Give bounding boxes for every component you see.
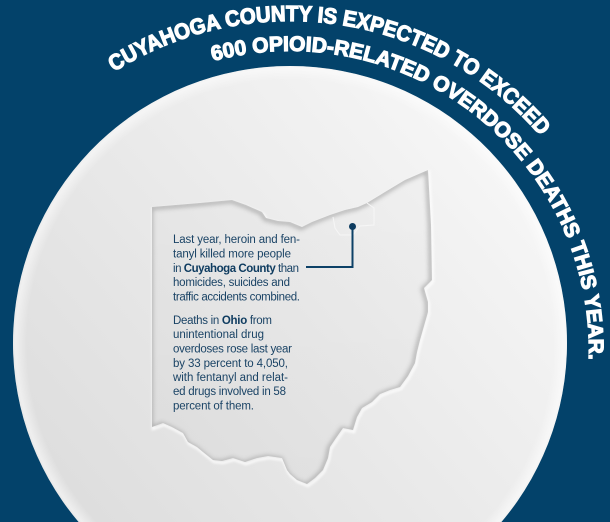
Ohio embossed shape — [151, 170, 433, 486]
text block: Ohio — [172, 315, 292, 412]
Cuyahoga County outline — [333, 203, 374, 235]
text block: Ohio: Deaths in Ohio from — [173, 315, 272, 327]
headline: CUYAHOGA COUNTY IS EXPECTED TO EXCEED — [108, 5, 550, 134]
text block: Cuyahoga County: in Cuyahoga County than — [173, 263, 299, 275]
text block: Ohio: with fentanyl and relat- — [172, 372, 288, 384]
text block: Cuyahoga County: traffic accidents combined. — [173, 292, 300, 304]
text block: Cuyahoga County: tanyl killed more people — [173, 248, 291, 260]
text block: Ohio: by 33 percent to 4,050, — [173, 358, 288, 370]
text block: Cuyahoga County — [173, 234, 300, 304]
connector line to Cuyahoga County — [306, 223, 356, 267]
text block: Ohio: percent of them. — [173, 400, 254, 412]
text block: Cuyahoga County: homicides, suicides and — [173, 277, 290, 289]
text block: Ohio: overdoses rose last year — [173, 344, 292, 356]
text block: Ohio: unintentional drug — [173, 329, 264, 341]
text block: Cuyahoga County: Last year, heroin and fen- — [173, 234, 300, 246]
pill — [13, 66, 567, 522]
text block: Ohio: ed drugs involved in 58 — [173, 386, 286, 398]
headline: 600 OPIOID-RELATED OVERDOSE DEATHS THIS YEAR. — [210, 36, 604, 359]
